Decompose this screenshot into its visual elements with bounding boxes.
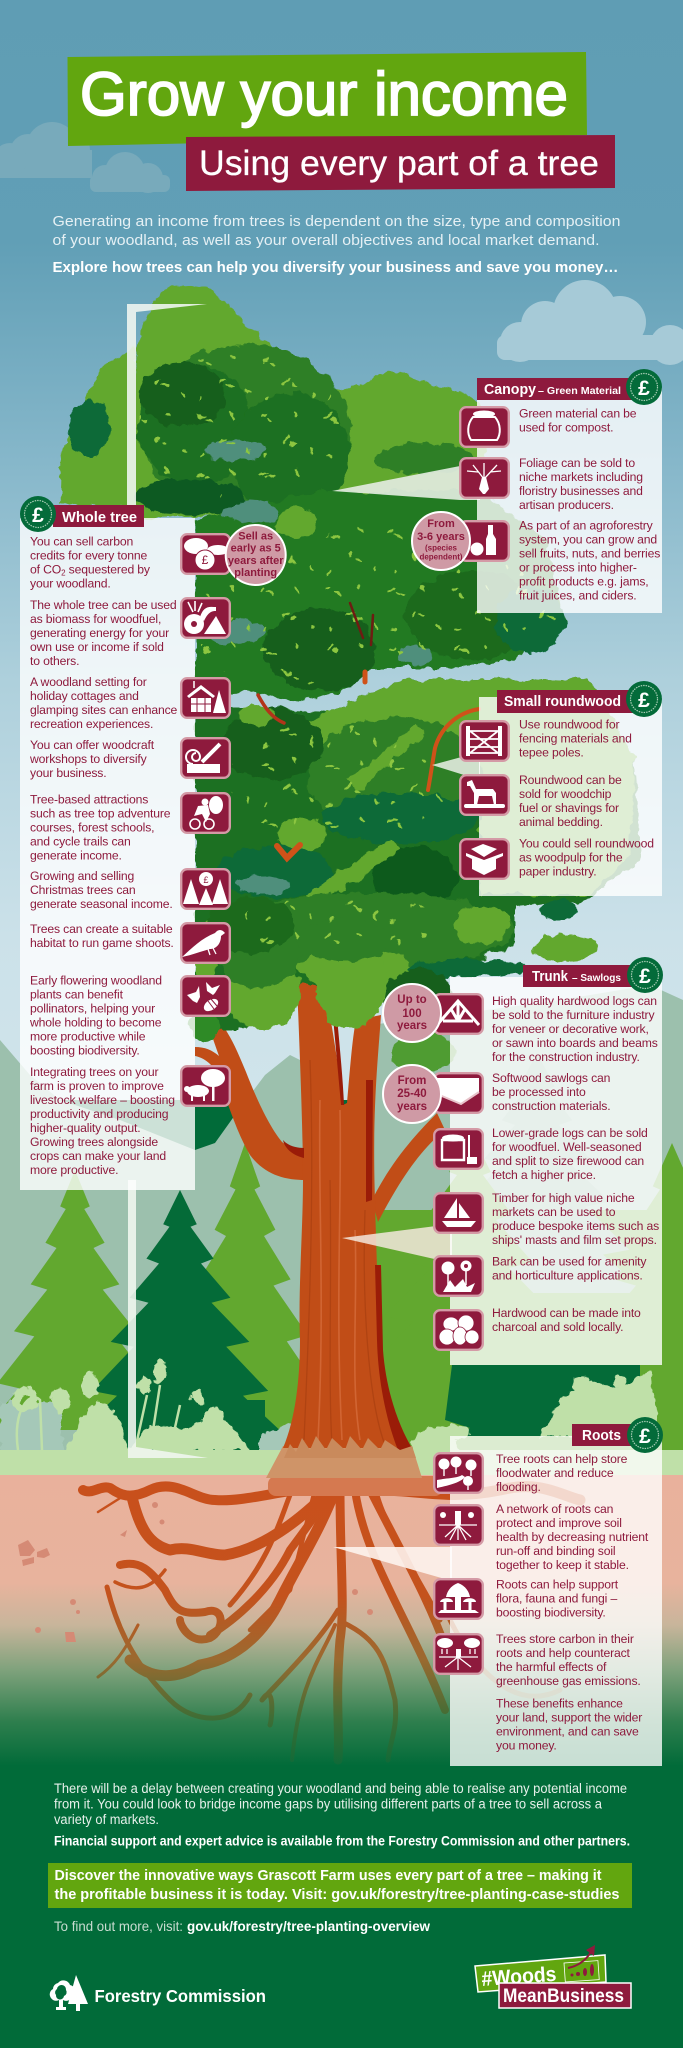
heading: roots: Roots bbox=[582, 1428, 621, 1444]
text: trunk benefits: markets can be used to bbox=[492, 1205, 616, 1219]
text: roots benefits: your land, support the wider bbox=[496, 1710, 642, 1724]
icon: carbon credits: £ bbox=[202, 553, 209, 567]
bubble: from 25-40 years: 25-40 bbox=[397, 1088, 427, 1100]
text: small roundwood benefits: paper industry. bbox=[519, 864, 596, 878]
text: small roundwood benefits: Use roundwood for bbox=[519, 718, 620, 732]
text: canopy benefits: or process into higher- bbox=[519, 560, 637, 574]
text: roots benefits: flooding. bbox=[496, 1480, 541, 1494]
intro text: Explore how trees can help you diversify your business and save you money… bbox=[52, 260, 618, 276]
text: whole tree benefits: generating energy for your bbox=[30, 626, 169, 640]
text: canopy benefits: As part of an agroforestry bbox=[519, 518, 654, 532]
text: whole tree benefits: workshops to diversify bbox=[29, 752, 148, 766]
text: trunk benefits: charcoal and sold locally. bbox=[492, 1320, 623, 1334]
text: canopy benefits: profit products e.g. jams, bbox=[519, 574, 649, 588]
text: delay note: There will be a delay between creating your woodland and being able to realise any potential income bbox=[54, 1781, 627, 1796]
text: trunk benefits: Bark can be used for amenity bbox=[492, 1254, 647, 1268]
text: roots benefits: run-off and binding soil bbox=[496, 1544, 616, 1558]
text: small roundwood benefits: as woodpulp for the bbox=[519, 850, 623, 864]
text: delay note: Financial support and expert advice is available from the Forestry Commission and other partners. bbox=[54, 1834, 630, 1848]
text: trunk benefits: Timber for high value niche bbox=[492, 1191, 635, 1205]
tree roots bbox=[83, 1486, 580, 1760]
text: canopy benefits: fruit juices, and ciders. bbox=[519, 588, 637, 602]
text: canopy benefits: artisan producers. bbox=[519, 498, 614, 512]
leader line: whole tree upper bbox=[127, 304, 207, 520]
panel: small roundwood bbox=[460, 681, 662, 896]
text: whole tree benefits: of CO bbox=[30, 562, 61, 576]
text: trunk benefits: and horticulture applications. bbox=[492, 1268, 643, 1282]
text: canopy benefits: sell fruits, nuts, and berries bbox=[519, 546, 660, 560]
text: whole tree benefits: more productive while bbox=[30, 1030, 146, 1044]
heading: trunk: – Sawlogs bbox=[572, 972, 621, 984]
text: trunk benefits: ships' masts and film set props. bbox=[492, 1233, 657, 1247]
sky background bbox=[0, 0, 683, 1100]
bubble: up to 100 years: years bbox=[397, 1020, 427, 1032]
bubble: sell as early as 5 years: Sell as bbox=[238, 530, 273, 542]
text: canopy benefits: Green material can be bbox=[519, 406, 637, 420]
text: trunk benefits: for woodfuel. Well-seasoned bbox=[492, 1140, 642, 1154]
text: whole tree benefits: Tree-based attractions bbox=[30, 792, 148, 806]
text: canopy benefits: floristry businesses and bbox=[519, 484, 643, 498]
bubble: from 3-6 years: 3-6 years bbox=[417, 531, 465, 543]
bubble: sell as early as 5 years: early as 5 bbox=[231, 542, 281, 554]
intro text: of your woodland, as well as your overall objectives and local market demand. bbox=[52, 233, 600, 249]
heading: roots bbox=[572, 1424, 640, 1446]
root crown band bbox=[268, 1476, 443, 1496]
bubble: from 25-40 years: years bbox=[397, 1101, 427, 1113]
text: roots benefits: boosting biodiversity. bbox=[496, 1606, 606, 1620]
footer background bbox=[0, 1772, 683, 2048]
icon: horse bbox=[460, 775, 509, 815]
panel: canopy bbox=[412, 369, 662, 613]
text: whole tree benefits: The whole tree can be used bbox=[30, 598, 177, 612]
text: whole tree benefits: sequestered by bbox=[65, 562, 151, 576]
text: roots benefits: flora, fauna and fungi – bbox=[496, 1592, 617, 1606]
icon: pound badge: £ bbox=[638, 689, 650, 712]
icon: pheasant bbox=[181, 923, 230, 963]
canopy foliage bbox=[60, 285, 640, 1073]
text: roots benefits: Trees store carbon in their bbox=[496, 1632, 634, 1646]
text: whole tree benefits: recreation experiences. bbox=[30, 717, 153, 731]
title: Grow your income bbox=[80, 60, 568, 129]
icon: pollinators bbox=[181, 976, 230, 1016]
pointer: trunk bbox=[342, 1224, 452, 1263]
icon: gate bbox=[460, 721, 509, 761]
text: whole tree benefits: Growing trees alongside bbox=[30, 1135, 158, 1149]
icon: carbon credits bbox=[181, 534, 230, 574]
text: whole tree benefits: courses, forest schools, bbox=[30, 820, 154, 834]
text: find out more: gov.uk/forestry/tree-planting-overview bbox=[187, 1918, 430, 1934]
bubble: from 3-6 years: From bbox=[427, 518, 455, 530]
panel: whole tree bbox=[20, 496, 286, 1190]
text: whole tree benefits: habitat to run game shoots. bbox=[30, 936, 174, 950]
text: whole tree benefits: farm is proven to improve bbox=[30, 1079, 164, 1093]
icon: floodwater trees bbox=[434, 1453, 483, 1493]
text: roots benefits: floodwater and reduce bbox=[496, 1466, 614, 1480]
text: roots benefits: Tree roots can help store bbox=[496, 1452, 628, 1466]
icon: foliage in vase bbox=[460, 458, 509, 498]
text: canopy benefits bbox=[519, 406, 660, 602]
subtitle bbox=[186, 135, 615, 191]
intro text: Generating an income from trees is dependent on the size, type and composition bbox=[52, 214, 620, 230]
bubble: from 25-40 years bbox=[383, 1065, 441, 1123]
text: trunk benefits: construction materials. bbox=[492, 1099, 610, 1113]
text: whole tree benefits: higher-quality output. bbox=[30, 1121, 141, 1135]
icon: carbon roots bbox=[434, 1634, 483, 1674]
text: whole tree benefits: as biomass for woodfuel, bbox=[30, 612, 161, 626]
text: trunk benefits: and split to size firewood can bbox=[492, 1154, 644, 1168]
text: trunk benefits: fetch a higher price. bbox=[492, 1168, 596, 1182]
left clouds bbox=[0, 122, 170, 193]
text: whole tree benefits: generate seasonal income. bbox=[30, 897, 173, 911]
pale ground strip bbox=[0, 1450, 683, 1478]
bubble: up to 100 years: Up to bbox=[397, 994, 427, 1006]
icon: pound badge: £ bbox=[639, 965, 651, 988]
text: whole tree benefits: Early flowering woodland bbox=[30, 974, 162, 988]
icon: pound badge bbox=[627, 1417, 663, 1453]
text: whole tree benefits: and cycle trails can bbox=[30, 834, 131, 848]
text: whole tree benefits bbox=[29, 534, 178, 1177]
icon: cycle trails bbox=[181, 793, 230, 833]
text: delay note: from it. You could look to bridge income gaps by utilising different parts of a tree to sell across a bbox=[54, 1796, 602, 1812]
tree trunk bbox=[195, 957, 445, 1458]
text: whole tree benefits: glamping sites can enhance bbox=[30, 703, 178, 717]
icon: pound badge: £ bbox=[32, 504, 44, 527]
callout: Grascott Farm: the profitable business it is today. Visit: gov.uk/forestry/tree-planting-case-studies bbox=[54, 1886, 620, 1903]
heading: whole tree bbox=[53, 505, 144, 527]
rocks bbox=[18, 1502, 373, 1642]
text: trunk benefits: Hardwood can be made into bbox=[492, 1306, 641, 1320]
icon: mushrooms bbox=[434, 1579, 483, 1619]
icon: pound badge bbox=[626, 681, 662, 717]
bubble: sell as early as 5 years: years after bbox=[228, 555, 284, 567]
text: trunk benefits: for veneer or decorative work, bbox=[492, 1022, 649, 1036]
text: whole tree benefits: Christmas trees can bbox=[30, 883, 136, 897]
bubble: from 3-6 years: dependent) bbox=[419, 552, 463, 562]
text: roots benefits: you money. bbox=[496, 1738, 557, 1752]
text: whole tree benefits: A woodland setting for bbox=[30, 675, 147, 689]
icon: pound badge: £ bbox=[638, 377, 650, 400]
text: whole tree benefits: your business. bbox=[30, 766, 106, 780]
bubble: from 3-6 years bbox=[412, 512, 470, 570]
panel: roots bbox=[434, 1417, 663, 1766]
heading: canopy bbox=[477, 378, 642, 400]
text: trunk benefits: be sold to the furniture industry bbox=[492, 1008, 655, 1022]
heading: canopy: Canopy bbox=[484, 382, 536, 398]
text: whole tree benefits: Growing and selling bbox=[30, 869, 134, 883]
text: small roundwood benefits: animal bedding. bbox=[519, 815, 603, 829]
text: trunk benefits: or sawn into boards and beams bbox=[492, 1036, 658, 1050]
bubble: from 25-40 years: From bbox=[398, 1075, 426, 1087]
text: roots benefits: These benefits enhance bbox=[496, 1696, 623, 1710]
callout: Grascott Farm: Discover the innovative ways Grascott Farm uses every part of a tree – making it bbox=[54, 1867, 602, 1884]
icon: biomass bbox=[181, 598, 230, 638]
pointer: roots bbox=[333, 1547, 452, 1581]
text: canopy benefits: niche markets including bbox=[519, 470, 643, 484]
logo: #WoodsMeanBusiness: MeanBusiness bbox=[503, 1986, 624, 2007]
icon: pound badge bbox=[627, 957, 663, 993]
soil bbox=[0, 1475, 683, 1775]
text: delay note: variety of markets. bbox=[54, 1812, 159, 1827]
background hills bbox=[0, 985, 683, 1450]
text: whole tree benefits: boosting biodiversity. bbox=[30, 1044, 140, 1058]
text: trunk benefits: be processed into bbox=[492, 1085, 586, 1099]
bubble: up to 100 years: 100 bbox=[402, 1008, 422, 1020]
text: whole tree benefits: 2 bbox=[61, 568, 66, 578]
text: whole tree benefits: livestock welfare – boosting bbox=[30, 1093, 175, 1107]
icon: flowers bbox=[434, 1256, 483, 1296]
icon: roof truss bbox=[434, 994, 483, 1034]
logo: Forestry Commission: Forestry Commission bbox=[94, 1986, 266, 2006]
icon: livestock and tree bbox=[181, 1066, 230, 1106]
text: whole tree benefits: holiday cottages and bbox=[30, 689, 139, 703]
leader line: whole tree lower bbox=[128, 1180, 208, 1458]
text: trunk benefits: Softwood sawlogs can bbox=[492, 1071, 610, 1085]
heading: small roundwood bbox=[497, 690, 642, 713]
bubble: from 3-6 years: (species bbox=[425, 544, 458, 552]
icon: charcoal bbox=[434, 1310, 483, 1350]
icon: box bbox=[460, 839, 509, 879]
heading: small roundwood: Small roundwood bbox=[504, 694, 621, 710]
text: roots benefits bbox=[496, 1452, 649, 1752]
text: delay note bbox=[54, 1781, 630, 1848]
text: whole tree benefits: You can offer woodcraft bbox=[30, 738, 155, 752]
heading: trunk bbox=[523, 965, 640, 987]
text: whole tree benefits: your woodland. bbox=[30, 576, 111, 590]
text: whole tree benefits: whole holding to become bbox=[29, 1016, 162, 1030]
text: find out more bbox=[54, 1918, 430, 1934]
panel: trunk bbox=[383, 957, 663, 1365]
text: whole tree benefits: more productive. bbox=[30, 1163, 118, 1177]
right cloud bbox=[497, 280, 683, 365]
icon: sawn board bbox=[434, 1073, 483, 1113]
pointer: canopy bbox=[332, 466, 480, 500]
pointer: small roundwood bbox=[432, 752, 480, 780]
text: whole tree benefits: plants can benefit bbox=[30, 988, 124, 1002]
text: whole tree benefits: productivity and producing bbox=[30, 1107, 168, 1121]
intro text bbox=[52, 214, 620, 276]
logo: Forestry Commission bbox=[50, 1975, 266, 2011]
trunk base collar bbox=[266, 1446, 422, 1478]
text: roots benefits: A network of roots can bbox=[496, 1502, 613, 1516]
logo: #WoodsMeanBusiness bbox=[475, 1945, 631, 2008]
logo: #WoodsMeanBusiness: #Woods bbox=[481, 1963, 557, 1991]
icon: pound badge: £ bbox=[639, 1425, 651, 1448]
text: whole tree benefits: crops can make your land bbox=[30, 1149, 166, 1163]
icon: christmas trees bbox=[181, 869, 230, 909]
text: roots benefits: protect and improve soil bbox=[496, 1516, 622, 1530]
text: whole tree benefits: pollinators, helping your bbox=[30, 1002, 155, 1016]
heading: canopy: – Green Material bbox=[538, 385, 621, 397]
text: small roundwood benefits: fencing materials and bbox=[519, 732, 632, 746]
text: whole tree benefits: own use or income if sold bbox=[30, 640, 164, 654]
text: whole tree benefits: such as tree top adventure bbox=[30, 806, 171, 820]
text: small roundwood benefits: tepee poles. bbox=[519, 746, 584, 760]
bubble: sell as early as 5 years bbox=[226, 525, 286, 585]
icon: firewood bag and axe bbox=[434, 1129, 483, 1169]
icon: pound badge bbox=[20, 496, 56, 532]
text: roots benefits: health by decreasing nutrient bbox=[496, 1530, 649, 1544]
text: small roundwood benefits: Roundwood can be bbox=[519, 773, 622, 787]
text: roots benefits: greenhouse gas emissions. bbox=[496, 1674, 641, 1688]
icon: cabin bbox=[181, 678, 230, 718]
text: trunk benefits bbox=[492, 994, 659, 1334]
text: whole tree benefits: Trees can create a suitable bbox=[30, 922, 173, 936]
text: small roundwood benefits: fuel or shavings for bbox=[519, 801, 619, 815]
callout: Grascott Farm bbox=[48, 1863, 632, 1908]
icon: pound badge bbox=[626, 369, 662, 405]
text: canopy benefits: system, you can grow and bbox=[519, 532, 657, 546]
text: trunk benefits: produce bespoke items such as bbox=[492, 1219, 659, 1233]
text: find out more: To find out more, visit: bbox=[54, 1918, 183, 1934]
ground and conifers bbox=[0, 1053, 683, 1460]
icon: woodcraft bbox=[181, 738, 230, 778]
foreground plants bbox=[0, 1360, 660, 1478]
text: whole tree benefits: You can sell carbon bbox=[30, 534, 133, 548]
icon: compost sack bbox=[460, 407, 509, 447]
text: whole tree benefits: Integrating trees on your bbox=[30, 1065, 158, 1079]
bubble: up to 100 years bbox=[383, 984, 441, 1042]
subtitle: Using every part of a tree bbox=[199, 143, 599, 183]
text: roots benefits: the harmful effects of bbox=[496, 1660, 607, 1674]
icon: christmas trees: £ bbox=[203, 875, 209, 885]
text: trunk benefits: High quality hardwood logs can bbox=[492, 994, 657, 1008]
text: roots benefits: together to keep it stable. bbox=[496, 1558, 629, 1572]
small branches in canopy bbox=[258, 603, 479, 858]
text: whole tree benefits: generate income. bbox=[30, 848, 122, 862]
icon: sailing boat bbox=[434, 1193, 483, 1233]
text: trunk benefits: Lower-grade logs can be sold bbox=[492, 1126, 648, 1140]
text: canopy benefits: used for compost. bbox=[519, 420, 613, 434]
text: whole tree benefits: to others. bbox=[30, 654, 79, 668]
text: small roundwood benefits: sold for woodchip bbox=[519, 787, 612, 801]
text: small roundwood benefits bbox=[519, 718, 654, 878]
bubble: sell as early as 5 years: planting bbox=[234, 567, 277, 579]
heading: trunk: Trunk bbox=[532, 969, 569, 985]
text: roots benefits: Roots can help support bbox=[496, 1578, 619, 1592]
text: small roundwood benefits: You could sell roundwood bbox=[519, 836, 654, 850]
text: roots benefits: environment, and can save bbox=[496, 1724, 639, 1738]
icon: bottle and fruit bbox=[460, 521, 509, 561]
text: canopy benefits: Foliage can be sold to bbox=[519, 456, 635, 470]
text: trunk benefits: for the construction industry. bbox=[492, 1050, 640, 1064]
text: roots benefits: roots and help counteract bbox=[496, 1646, 631, 1660]
icon: soil network bbox=[434, 1505, 483, 1545]
text: whole tree benefits: credits for every tonne bbox=[30, 548, 147, 562]
heading: whole tree: Whole tree bbox=[62, 510, 137, 526]
